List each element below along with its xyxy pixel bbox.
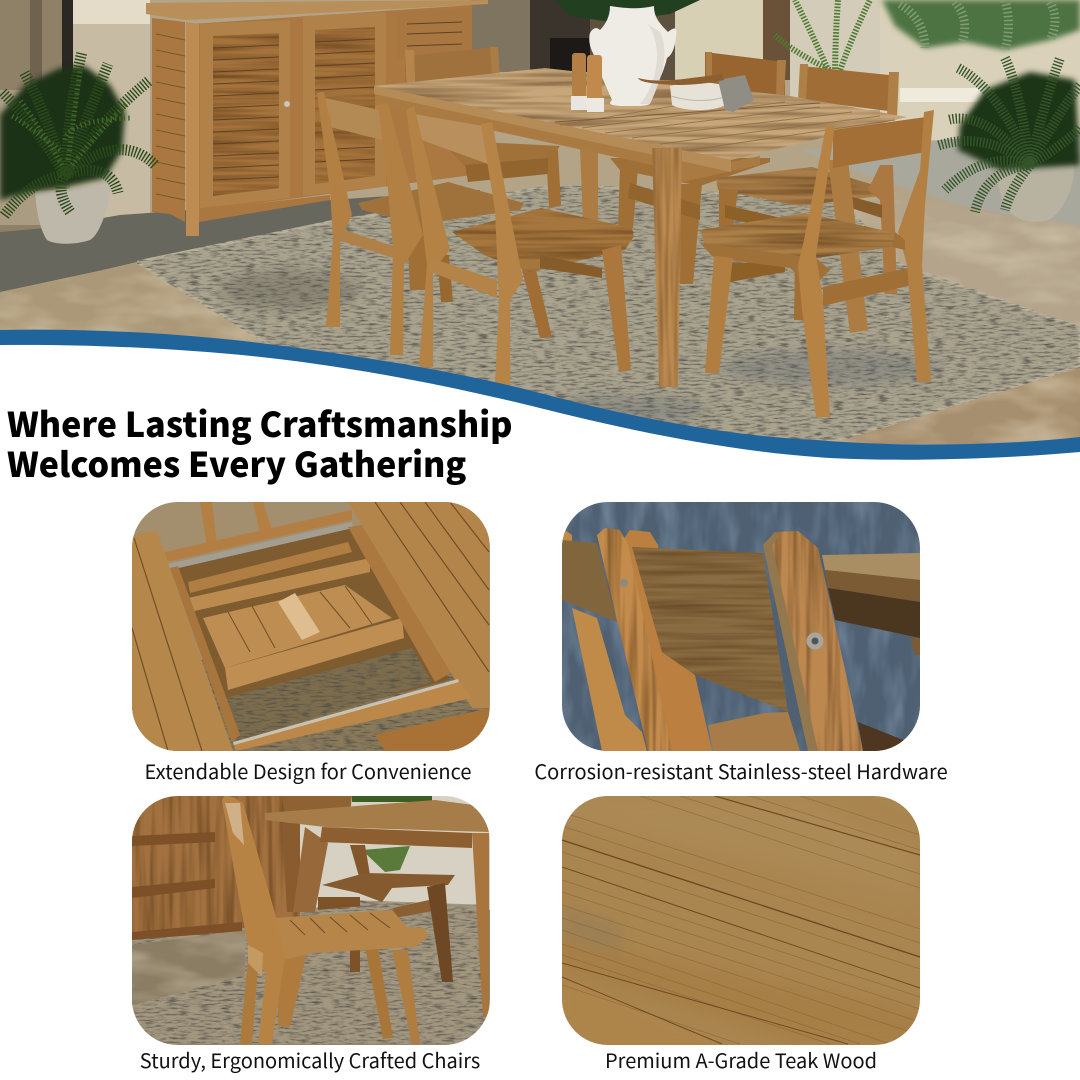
cabinet door right bbox=[397, 8, 472, 60]
caption: premium teak: Premium A-Grade Teak Wood bbox=[605, 1045, 877, 1074]
cabinet door left bbox=[200, 20, 290, 208]
chair upright bbox=[763, 531, 863, 751]
background plants bbox=[555, 0, 1080, 85]
rear chair right bbox=[716, 64, 899, 294]
bowls, napkin and servers bbox=[638, 74, 754, 112]
potted fern right bbox=[937, 58, 1080, 222]
dining chair centre bbox=[406, 106, 634, 385]
rear chair bbox=[282, 795, 455, 982]
folded leaf storage bbox=[188, 542, 404, 690]
extension table bbox=[374, 68, 907, 387]
panel: ergonomic chairs photo bbox=[132, 796, 490, 1045]
potted fern left bbox=[0, 52, 155, 244]
chair backrest bbox=[632, 547, 788, 712]
stainless bolt bbox=[806, 632, 824, 650]
table rear leg bbox=[580, 148, 598, 221]
white ceramic vase bbox=[589, 6, 677, 106]
table right leg bbox=[828, 160, 868, 333]
salt and pepper shakers bbox=[571, 53, 604, 112]
green plant bbox=[352, 796, 432, 802]
left table leaf bbox=[132, 531, 233, 751]
teak sideboard cabinet bbox=[146, 0, 488, 236]
caption: ergonomic chairs: Sturdy, Ergonomically Crafted Chairs bbox=[140, 1045, 480, 1074]
pot bbox=[35, 178, 112, 244]
dining chair left bbox=[317, 92, 524, 355]
background walls and curtains bbox=[0, 0, 1080, 340]
panel: teak wood close-up bbox=[562, 796, 920, 1045]
table apron bbox=[375, 92, 760, 182]
rear chair centre bbox=[610, 52, 786, 284]
rear chair left bbox=[405, 47, 561, 302]
caption: extendable design: Extendable Design for Convenience bbox=[145, 756, 471, 785]
wave divider: blue ribbon over white bbox=[0, 330, 1080, 470]
cabinet door centre bbox=[303, 12, 386, 196]
right table leaf bbox=[348, 502, 489, 708]
title bbox=[7, 398, 512, 487]
wood grain bbox=[562, 796, 920, 1044]
dining chair front right bbox=[700, 110, 934, 417]
plank joints bbox=[562, 796, 920, 1044]
panel: stainless hardware photo bbox=[562, 502, 920, 751]
table bbox=[265, 800, 489, 1017]
hero photo: teak dining set on patio bbox=[0, 0, 1080, 460]
front chair bbox=[222, 795, 428, 1044]
table top bbox=[374, 68, 907, 160]
table front leg bbox=[652, 148, 682, 387]
title: Where Lasting Craftsmanship bbox=[7, 398, 512, 447]
title: Welcomes Every Gathering bbox=[7, 438, 466, 487]
small bolt bbox=[620, 579, 628, 587]
rug bbox=[137, 185, 1080, 442]
floor flagstones bbox=[0, 190, 1080, 445]
slatted fence cabinet bbox=[132, 796, 300, 940]
caption: stainless hardware: Corrosion-resistant Stainless-steel Hardware bbox=[534, 756, 948, 785]
panel: extendable table photo bbox=[132, 502, 490, 751]
